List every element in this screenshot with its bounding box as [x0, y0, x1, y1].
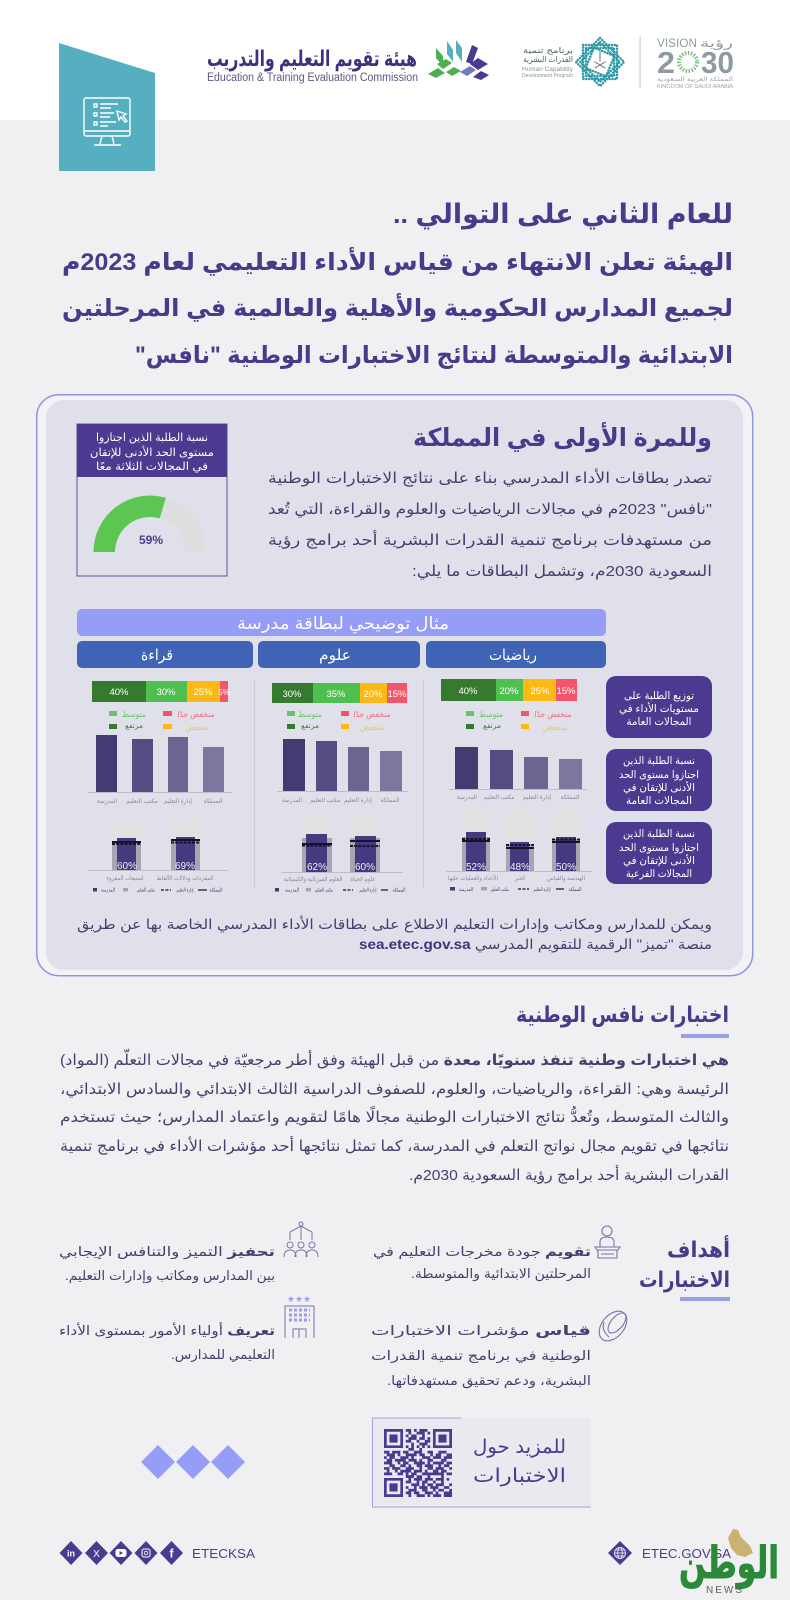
bar chart: maths overall: [449, 747, 587, 801]
logo: Vision 2030: [657, 36, 734, 90]
section paragraph: نتائجها في تقويم مجال نواتج التعلم في المدرسة، كما تمثل نتائجها أحد مؤشرات الأداء في برنامج تنمية: [60, 1136, 729, 1156]
bar chart: reading overall: [88, 735, 232, 805]
subject header: science: [258, 641, 420, 668]
bullet chart: science subdomains: العلوم الفيزيائية والكيميائية: [284, 876, 343, 883]
callout: sub domains mastery: اجتازوا مستوى الحد: [619, 842, 699, 854]
section heading: Nafes tests: اختبارات نافس الوطنية: [516, 1002, 729, 1028]
bar chart: science overall: المدرسة: [282, 797, 302, 804]
maths charts: [441, 679, 592, 893]
bullet chart: maths subdomains: الأعداد والعمليات عليها: [448, 874, 498, 882]
gauge card 59%: مستوى الحد الأدنى للإتقان: [90, 445, 214, 459]
legend: science series: إدارة التعليم: [360, 888, 377, 894]
section paragraph: الرئيسة وهي: القراءة، والرياضيات، والعلوم، للصفوف الدراسية الثالث الابتدائي والسادس الابتدائي،: [60, 1081, 729, 1099]
legend: reading series: [93, 888, 222, 894]
bar chart: science overall: [277, 739, 408, 804]
legend: levels: متوسط: [122, 710, 146, 719]
bar chart: reading overall: مكتب التعليم: [126, 798, 158, 805]
logo: Human Capability Development Program: القدرات البشرية: [523, 55, 573, 64]
bullet chart: maths subdomains: 48%: [510, 862, 530, 873]
legend: science levels: متوسط: [298, 710, 322, 719]
bullet chart: maths subdomains: [446, 809, 592, 882]
callout: general domains mastery: [606, 749, 712, 811]
callout: general domains mastery: اجتازوا مستوى الحد: [619, 769, 699, 781]
bar chart: reading overall: إدارة التعليم: [164, 798, 192, 805]
callout: levels distribution: توزيع الطلبة على: [624, 690, 694, 702]
icon: LinkedIn: in: [67, 1548, 75, 1558]
callout: sub domains mastery: المجالات الفرعية: [626, 868, 692, 880]
goal: motivate: [59, 1222, 318, 1284]
section paragraph: [60, 1049, 729, 1184]
callout: general domains mastery: الأدنى للإتقان في: [623, 781, 695, 794]
gauge card 59%: نسبة الطلبة الذين اجتازوا: [96, 432, 208, 444]
goals heading: [639, 1234, 730, 1301]
handle text: ETECKSA: [192, 1546, 255, 1561]
section paragraph: القدرات البشرية أحد برامج رؤية السعودية 2030م.: [409, 1165, 729, 1184]
bullet chart: reading subdomains: 60%: [117, 861, 137, 872]
icon: Facebook: [160, 1541, 183, 1565]
icon: Facebook: f: [170, 1546, 174, 1560]
goal: evaluate: المرحلتين الابتدائية والمتوسطة.: [411, 1266, 591, 1282]
panel: school performance cards: [37, 395, 753, 976]
legend: science levels: منخفض: [360, 723, 384, 732]
title: للعام الثاني على التوالي ..: [393, 199, 733, 230]
stacked bar: science levels: [272, 683, 407, 703]
stacked bar: maths levels: 25%: [530, 686, 550, 697]
icon: people network: [284, 1222, 318, 1257]
decorative diamonds: [141, 1445, 245, 1479]
divider between logos: [640, 36, 641, 88]
bar chart: reading overall: المدرسة: [97, 798, 117, 805]
icon: X: X: [93, 1549, 100, 1560]
icon: monitor checklist: [84, 98, 130, 145]
legend: reading series: مكتب التعليم: [137, 888, 155, 894]
legend: reading series: المملكة: [210, 888, 222, 894]
goal: inform: التعليمي للمدارس.: [171, 1347, 275, 1363]
logo: Vision 2030: رؤية: [700, 36, 733, 51]
stacked bar: science levels: 15%: [387, 689, 407, 700]
bar chart: science overall: إدارة التعليم: [344, 797, 372, 804]
website: ETEC.GOV.SA: [642, 1546, 731, 1561]
watermark: Alwatan News: [679, 1529, 779, 1596]
icon: LinkedIn: [60, 1541, 82, 1565]
logo: Vision 2030: المملكة العربية السعودية: [657, 76, 733, 83]
callout: sub domains mastery: [606, 822, 712, 884]
bar chart: maths overall: إدارة التعليم: [523, 794, 551, 801]
title: الهيئة تعلن الانتهاء من قياس الأداء التعليمي لعام 2023م: [62, 247, 733, 276]
bar chart: science overall: مكتب التعليم: [310, 797, 340, 804]
callout: general domains mastery: نسبة الطلبة الذين: [623, 755, 695, 767]
legend: science series: [275, 888, 406, 894]
panel closing text: [77, 915, 712, 953]
legend: science levels: منخفض جدًا: [354, 710, 390, 719]
subject header: reading: قراءة: [141, 647, 173, 664]
stacked bar: science levels: 35%: [326, 689, 346, 700]
icon: star emblem: [576, 38, 624, 86]
legend: maths series: المملكة: [568, 887, 582, 893]
legend: levels: مرتفع: [125, 723, 143, 730]
section paragraph: والثالث المتوسط، وتُعدُّ نتائج الاختبارات الوطنية مجالًا هامًا لتقويم واعتماد المدارس؛ حيث تستخدم: [60, 1105, 729, 1126]
logo: Vision 2030: VISION: [657, 36, 697, 50]
legend: science series: المملكة: [392, 888, 406, 894]
QR callout: more about the tests: للمزيد حول: [473, 1437, 566, 1458]
logo: Human Capability Development Program: Development Program: [522, 73, 573, 79]
icon: gauge dial: [594, 1306, 632, 1346]
subject header: maths: رياضيات: [489, 647, 537, 664]
callout: levels distribution: مستويات الأداء في: [619, 702, 699, 715]
logo: Vision 2030: KINGDOM OF SAUDI ARABIA: [657, 84, 734, 90]
section heading: Nafes tests: [516, 1002, 729, 1038]
panel closing text: ويمكن للمدارس ومكاتب وإدارات التعليم الاطلاع على بطاقات الأداء المدرسي الخاصة بها عن طريق: [77, 915, 712, 933]
panel intro text: [268, 468, 712, 581]
bullet chart: maths subdomains: 50%: [556, 862, 576, 873]
panel intro text: "نافس" 2023م في مجالات الرياضيات والعلوم والقراءة، التي تُعد: [268, 501, 712, 519]
icon: podium: [595, 1226, 620, 1258]
legend: maths levels: منخفض جدًا: [534, 710, 572, 719]
panel heading: وللمرة الأولى في المملكة: [413, 422, 712, 453]
stacked bar: maths levels: 40%: [458, 686, 478, 697]
goal: measure: البشرية، ودعم تحقيق مستهدفاتها.: [387, 1373, 591, 1389]
legend: levels: منخفض: [185, 723, 209, 732]
bullet chart: reading subdomains: [88, 819, 228, 882]
legend: maths series: مكتب التعليم: [491, 887, 509, 893]
goal: motivate: تحفيز التميز والتنافس الإيجابي: [59, 1244, 275, 1260]
goal: inform: تعريف أولياء الأمور بمستوى الأداء: [59, 1322, 275, 1339]
icon: globe: [608, 1541, 632, 1565]
title: [62, 199, 733, 369]
goal: measure: الوطنية في برنامج تنمية القدرات: [371, 1348, 591, 1364]
icon: Instagram: [134, 1541, 158, 1565]
stacked bar: reading levels: 25%: [193, 687, 213, 698]
panel closing text: منصة "تميز" الرقمية للتقويم المدرسي sea.etec.gov.sa: [359, 936, 712, 953]
legend: science series: مكتب التعليم: [315, 888, 333, 894]
legend: maths series: إدارة التعليم: [534, 887, 551, 893]
reading charts: [88, 681, 232, 894]
goal: motivate: بين المدارس ومكاتب وإدارات التعليم.: [65, 1268, 275, 1284]
callout: general domains mastery: المجالات العامة: [626, 795, 692, 807]
subject header: reading: [77, 641, 253, 668]
panel intro text: السعودية 2030م، وتشمل البطاقات ما يلي:: [412, 563, 712, 581]
icon: YouTube: [110, 1541, 132, 1565]
social media handle: [60, 1541, 255, 1565]
panel intro text: تصدر بطاقات الأداء المدرسي بناء على نتائج الاختبارات الوطنية: [268, 468, 712, 488]
stacked bar: reading levels: 30%: [156, 687, 176, 698]
goals heading: الاختبارات: [639, 1267, 730, 1292]
logo: Vision 2030: 2: [657, 45, 675, 80]
logo: Human Capability Development Program: [522, 38, 624, 86]
legend: maths series: [450, 887, 582, 893]
subject header: maths: [426, 641, 606, 668]
callout: levels distribution: [606, 676, 712, 738]
bullet chart: maths subdomains: الجبر: [514, 875, 525, 882]
legend: reading series: المدرسة: [101, 888, 115, 894]
legend: levels: [109, 710, 214, 732]
stacked bar: science levels: 30%: [282, 689, 302, 700]
example heading bar: [77, 609, 606, 636]
example heading bar: مثال توضيحي لبطاقة مدرسة: [237, 614, 449, 634]
legend: science series: المدرسة: [285, 888, 299, 894]
logo Arabic name: هيئة تقويم التعليم والتدريب: [207, 46, 417, 72]
logo: Education and Training Evaluation Commission: [207, 40, 489, 84]
stacked bar: reading levels: 40%: [109, 687, 129, 698]
QR code: [384, 1429, 452, 1497]
stacked bar: science levels: 20%: [363, 689, 383, 700]
bullet chart: maths subdomains: الهندسة والقياس: [547, 875, 585, 882]
watermark: Alwatan News: NEWS: [706, 1585, 744, 1596]
legend: maths levels: [466, 710, 572, 732]
legend: maths levels: منخفض: [543, 723, 567, 732]
goal: evaluate: [373, 1226, 620, 1282]
panel intro text: من مستهدفات برنامج تنمية القدرات البشرية أحد برامج رؤية: [268, 530, 712, 549]
icon: map: [728, 1529, 753, 1557]
stacked bar: maths levels: [441, 679, 577, 701]
goals heading: أهداف: [667, 1234, 730, 1262]
title: الابتدائية والمتوسطة لنتائج الاختبارات الوطنية "نافس": [135, 342, 733, 369]
stacked bar: reading levels: 5%: [218, 688, 230, 697]
legend: maths series: المدرسة: [459, 887, 473, 893]
title: لجميع المدارس الحكومية والأهلية والعالمية في المرحلتين: [62, 293, 733, 322]
legend: maths levels: مرتفع: [483, 723, 501, 730]
bullet chart: science subdomains: [281, 816, 403, 883]
goal: measure: قياس مؤشرات الاختبارات: [371, 1323, 591, 1339]
gauge card 59%: [77, 424, 227, 576]
subject header: science: علوم: [319, 647, 351, 664]
callout: levels distribution: المجالات العامة: [626, 716, 692, 728]
teal header tab with monitor icon: [59, 43, 155, 171]
stacked bar: maths levels: 20%: [499, 686, 519, 697]
logo: Human Capability Development Program: برنامج تنمية: [523, 46, 573, 55]
bar chart: maths overall: مكتب التعليم: [484, 794, 514, 801]
QR callout: more about the tests: الاختبارات: [473, 1466, 566, 1487]
callout: sub domains mastery: نسبة الطلبة الذين: [623, 828, 695, 840]
bullet chart: reading subdomains: المفردات ودلالات الألفاظ: [156, 874, 214, 882]
section paragraph: هي اختبارات وطنية تنفذ سنويًا، معدة من قبل الهيئة وفق أطر مرجعيّة في مجالات التعلّم (المواد): [60, 1049, 729, 1070]
stacked bar: maths levels: 15%: [556, 686, 576, 697]
bullet chart: science subdomains: 62%: [307, 862, 327, 873]
gauge card 59%: 59%: [139, 533, 163, 547]
icon: building: ★★★: [287, 1294, 311, 1304]
logo: Human Capability Development Program: Human Capability: [522, 67, 573, 73]
gauge card 59%: في المجالات الثلاثة معًا: [96, 461, 208, 473]
bar chart: reading overall: المملكة: [204, 798, 223, 805]
bullet chart: science subdomains: 60%: [355, 862, 375, 873]
bullet chart: science subdomains: علوم الحياة: [350, 876, 376, 883]
icon: ETEC leaf mark: [428, 40, 489, 80]
legend: science levels: مرتفع: [301, 723, 319, 730]
goal: measure: [371, 1306, 632, 1389]
legend: science levels: [287, 710, 390, 732]
bar chart: maths overall: المملكة: [560, 794, 580, 801]
legend: reading series: إدارة التعليم: [176, 888, 194, 894]
logo: Vision 2030: 30: [701, 45, 734, 80]
icon: building: [285, 1294, 314, 1338]
bar chart: maths overall: المدرسة: [457, 794, 477, 801]
bullet chart: maths subdomains: 52%: [466, 862, 486, 873]
legend: maths levels: متوسط: [479, 710, 503, 719]
bullet chart: reading subdomains: استيعاب المقروء: [106, 875, 144, 882]
callout: sub domains mastery: الأدنى للإتقان في: [623, 854, 695, 867]
icon: X: [85, 1541, 108, 1565]
stacked bar: reading levels: [92, 681, 230, 702]
website: [608, 1541, 731, 1565]
QR callout: more about the tests: [372, 1418, 591, 1507]
logo English name: Education & Training Evaluation Commission: [207, 72, 418, 84]
bar chart: science overall: المملكة: [380, 797, 400, 804]
goal: evaluate: تقويم جودة مخرجات التعليم في: [373, 1244, 591, 1260]
legend: levels: منخفض جدًا: [178, 710, 214, 719]
goal: inform: [59, 1294, 314, 1363]
gauge chart: [160, 498, 206, 552]
science charts: [272, 683, 408, 894]
bullet chart: reading subdomains: 69%: [175, 861, 195, 872]
